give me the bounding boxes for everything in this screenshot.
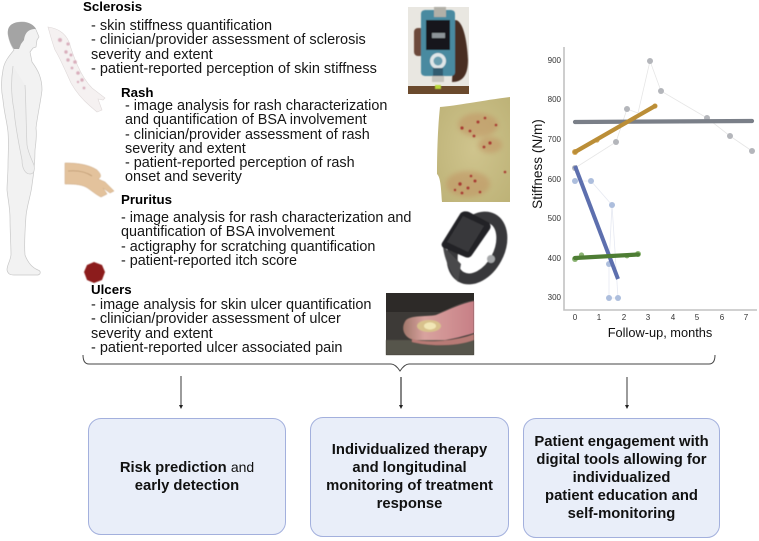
text block: sclerosis: - skin stiffness quantification <box>91 18 272 34</box>
icon: scratching hand <box>65 163 114 197</box>
text block: pruritus <box>121 192 411 269</box>
text block: rash: and quantification of BSA involvement <box>125 112 367 128</box>
text block: pruritus: - actigraphy for scratching quantification <box>121 239 375 255</box>
text block: rash: - clinician/provider assessment of rash <box>125 127 370 143</box>
grey series <box>572 58 755 171</box>
photo: finger ulcer <box>386 293 474 355</box>
outcome box: individualized therapy: response <box>377 496 442 512</box>
outcome box: individualized therapy: monitoring of treatment <box>326 478 493 494</box>
x axis title: Follow-up, months <box>608 325 712 340</box>
x axis tick labels: 0 <box>573 313 578 322</box>
photo: rash on skin <box>437 97 510 202</box>
outcome box: risk prediction: early detection <box>135 478 239 494</box>
green series <box>572 251 641 262</box>
y axis tick labels: 400 <box>548 254 562 263</box>
outcome box: risk prediction: Risk prediction and <box>120 459 254 476</box>
text block: sclerosis: - patient-reported perception of skin stiffness <box>91 61 377 77</box>
text block: sclerosis: severity and extent <box>91 47 213 63</box>
text block: rash: severity and extent <box>125 141 246 157</box>
text block: rash: onset and severity <box>125 169 242 185</box>
text block: pruritus: Pruritus <box>121 192 172 207</box>
x axis tick labels <box>573 313 749 322</box>
blue series <box>572 166 621 301</box>
icon: actigraphy watch <box>442 209 512 287</box>
outcome box: patient engagement: Patient engagement with <box>534 434 709 450</box>
text block: rash: Rash <box>121 85 154 100</box>
icon: arm with rash <box>48 27 105 112</box>
photo: skin stiffness device <box>408 7 469 94</box>
text block: pruritus: - image analysis for rash characterization and <box>121 210 411 226</box>
y axis tick labels: 300 <box>548 293 562 302</box>
text block: pruritus: - patient-reported itch score <box>121 253 297 269</box>
arrow: to risk prediction <box>179 376 183 409</box>
outcome box: individualized therapy: Individualized therapy <box>332 442 487 458</box>
arrow: to patient engagement <box>625 377 629 409</box>
outcome box: patient engagement: individualized <box>573 470 670 486</box>
text block: sclerosis: - clinician/provider assessment of sclerosis <box>91 32 366 48</box>
x axis tick labels: 4 <box>671 313 676 322</box>
text block: ulcers: Ulcers <box>91 282 132 297</box>
icon: ulcer <box>84 262 105 283</box>
x axis tick labels: 5 <box>695 313 700 322</box>
brace <box>83 355 715 371</box>
x axis tick labels: 6 <box>720 313 725 322</box>
y axis title: Stiffness (N/m) <box>530 119 545 209</box>
y axis tick labels <box>548 56 562 302</box>
text block: rash <box>121 85 387 185</box>
y axis tick labels: 900 <box>548 56 562 65</box>
x axis tick labels: 7 <box>744 313 749 322</box>
orange series <box>572 103 658 155</box>
outcome box: patient engagement: digital tools allowing for <box>536 452 707 468</box>
chart axes <box>564 47 757 310</box>
outcome box: individualized therapy <box>310 417 509 537</box>
chart: stiffness over follow-up <box>530 47 757 340</box>
y axis tick labels: 700 <box>548 135 562 144</box>
outcome box: patient engagement <box>523 418 720 538</box>
outcome box: patient engagement: self-monitoring <box>568 506 675 522</box>
text block: ulcers: - image analysis for skin ulcer quantification <box>91 297 371 313</box>
text block: ulcers: severity and extent <box>91 326 213 342</box>
text block: ulcers: - patient-reported ulcer associated pain <box>91 340 342 356</box>
text block: ulcers <box>91 282 371 356</box>
y axis tick labels: 600 <box>548 175 562 184</box>
text block: sclerosis <box>83 0 377 77</box>
y axis tick labels: 800 <box>548 95 562 104</box>
arrow: to individualized therapy <box>399 377 403 409</box>
icon: human body figure <box>2 22 42 275</box>
x axis tick labels: 1 <box>597 313 602 322</box>
outcome box: patient engagement: patient education and <box>545 488 698 504</box>
y axis tick labels: 500 <box>548 214 562 223</box>
x axis tick labels: 3 <box>646 313 651 322</box>
text block: pruritus: quantification of BSA involvement <box>121 224 335 240</box>
text block: ulcers: - clinician/provider assessment of ulcer <box>91 311 341 327</box>
outcome box: individualized therapy: and longitudinal <box>352 460 467 476</box>
outcome box: risk prediction <box>88 418 286 535</box>
text block: rash: - image analysis for rash characterization <box>125 98 387 114</box>
text block: rash: - patient-reported perception of rash <box>125 155 355 171</box>
x axis tick labels: 2 <box>622 313 627 322</box>
